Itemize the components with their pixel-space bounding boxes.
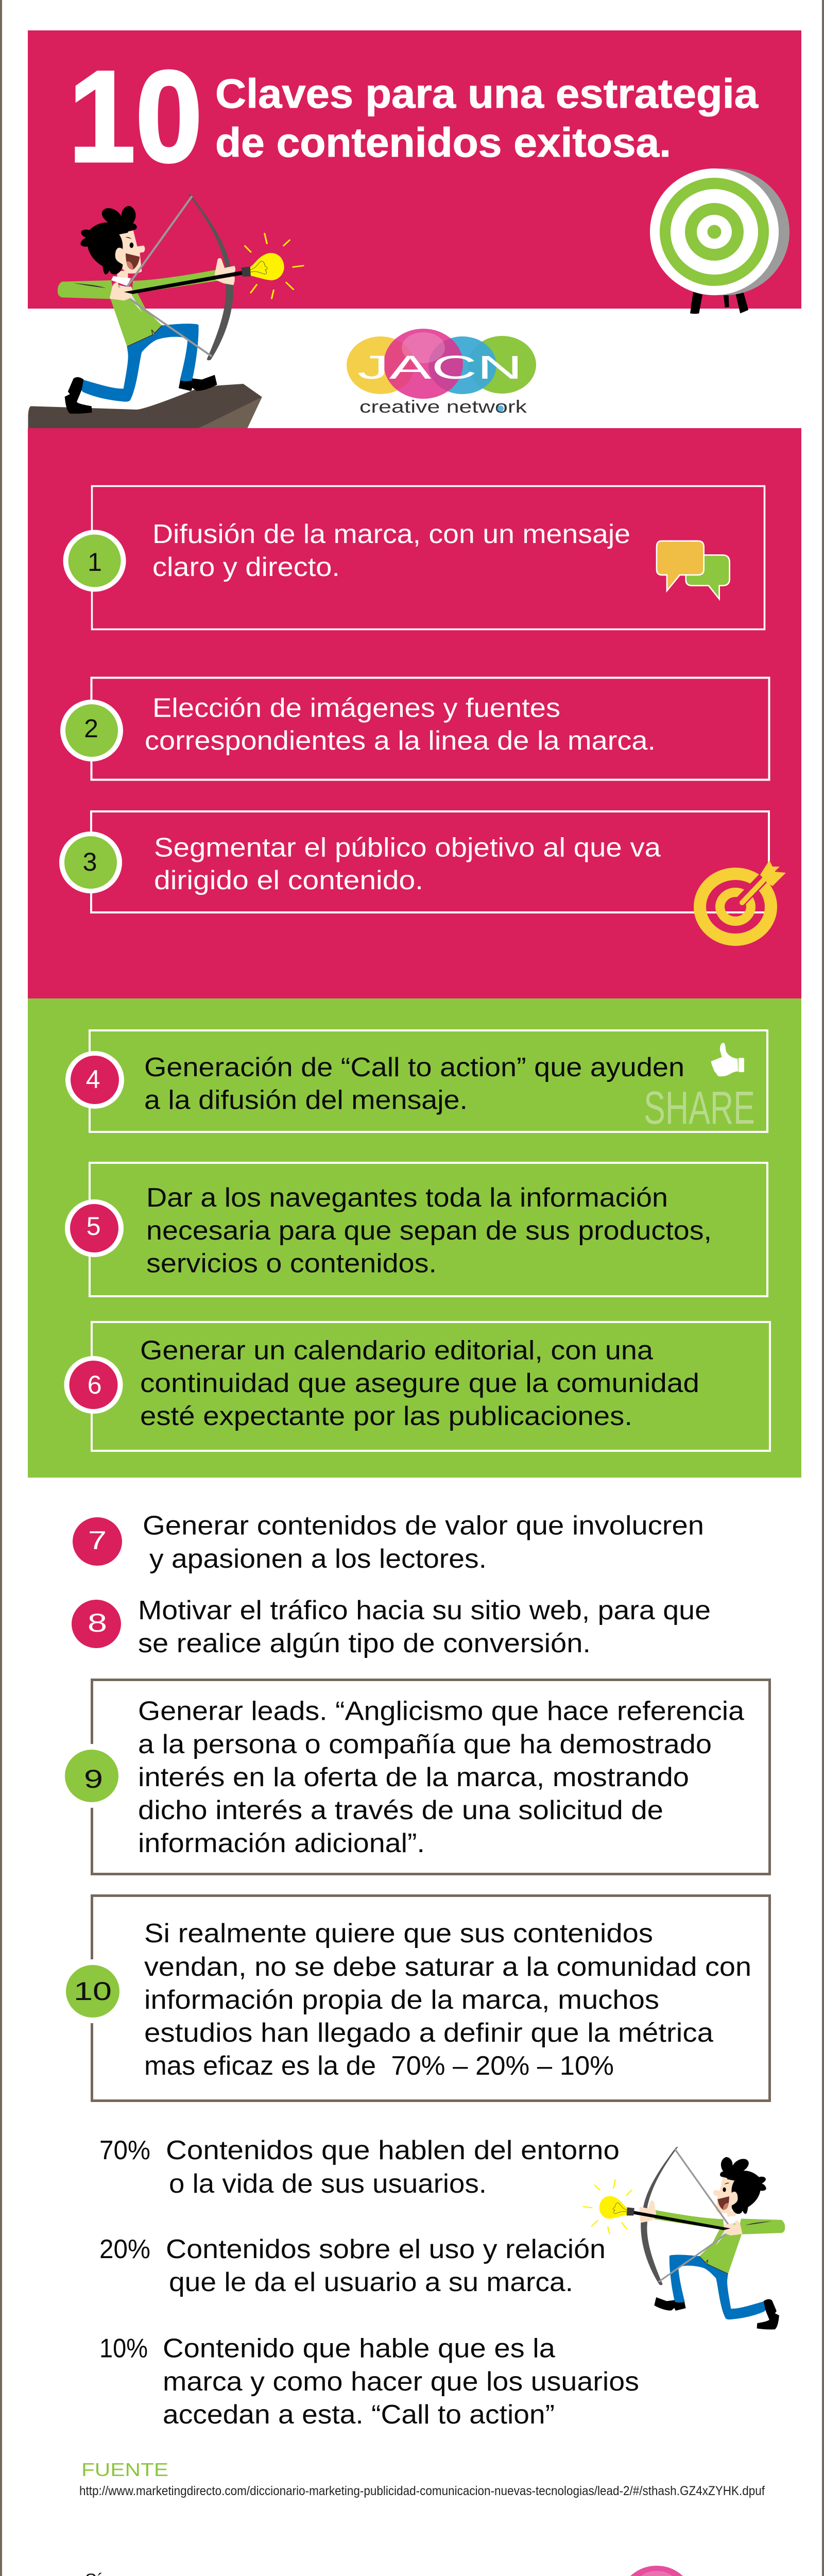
text block: 10 percent: marca y como hacer que los usuarios <box>163 2367 639 2397</box>
key 10 text: información propia de la marca, muchos <box>144 1985 659 2015</box>
icon: mirrored archer <box>583 2147 785 2330</box>
icon: rock ledge <box>28 384 262 429</box>
key 3 text: Segmentar el público objetivo al que va <box>154 833 661 862</box>
key 8 text: Motivar el tráfico hacia su sitio web, para que <box>138 1596 711 1625</box>
badge 10 <box>61 1959 125 2023</box>
text block: 70 percent: o la vida de sus usuarios. <box>169 2169 487 2199</box>
key 7 <box>73 1511 704 1574</box>
key 4 text: a la difusión del mensaje. <box>144 1085 468 1115</box>
key 6 text: Generar un calendario editorial, con una <box>140 1335 653 1365</box>
badge 3: 3 <box>83 848 97 876</box>
logo: JACN creative network: creative network <box>359 397 527 417</box>
badge 6: 6 <box>88 1370 102 1399</box>
badge 2: 2 <box>84 714 98 743</box>
key 6 text: continuidad que asegure que la comunidad <box>140 1368 699 1398</box>
title <box>215 71 759 165</box>
key 5 text: Dar a los navegantes toda la información <box>146 1183 668 1213</box>
text block: 10 percent: Contenido que hable que es la <box>163 2334 555 2364</box>
logo: JACN creative network: JACN <box>357 349 523 386</box>
key 3 text <box>154 833 661 895</box>
badge 5: 5 <box>87 1212 101 1241</box>
panel: header banner <box>28 30 801 309</box>
share label: SHARE <box>644 1082 755 1134</box>
key 2 box <box>92 678 769 780</box>
key 4 text <box>144 1053 684 1115</box>
badge 6 <box>64 1356 123 1414</box>
key 1 text <box>152 519 630 582</box>
badge 4: 4 <box>86 1065 100 1094</box>
badge 9: 9 <box>84 1765 103 1793</box>
text block: 10 percent: 10% <box>99 2334 148 2364</box>
badge 4 <box>65 1051 124 1109</box>
key 9 text: interés en la oferta de la marca, mostrando <box>138 1762 689 1792</box>
key 4 box <box>90 1030 767 1132</box>
key 9 text <box>138 1696 744 1858</box>
text block: 20 percent: 20% <box>99 2234 150 2264</box>
key 6 text <box>140 1335 699 1431</box>
icon: yellow target with arrow <box>700 860 786 940</box>
key 10 box <box>92 1896 769 2101</box>
key 10 <box>61 1896 769 2101</box>
badge 10: 10 <box>74 1977 112 2006</box>
key 1 text: Difusión de la marca, con un mensaje <box>152 519 630 549</box>
key 9 text: información adicional”. <box>138 1828 425 1858</box>
title: de contenidos exitosa. <box>215 120 671 165</box>
heading: big number 10: 10 <box>68 44 202 189</box>
key 4 text: Generación de “Call to action” que ayuden <box>144 1053 684 1082</box>
key 7 text <box>143 1511 704 1574</box>
badge 2 <box>60 700 123 761</box>
key 1 text: claro y directo. <box>152 552 340 582</box>
key 5 text: servicios o contenidos. <box>146 1249 437 1279</box>
icon: speech bubbles <box>657 541 730 599</box>
key 2 text <box>145 693 656 756</box>
text block: 70 percent: Contenidos que hablen del entorno <box>166 2136 620 2165</box>
key 9 text: a la persona o compañía que ha demostrado <box>138 1730 712 1759</box>
key 10 text: estudios han llegado a definir que la métrica <box>144 2018 713 2048</box>
source heading: FUENTE <box>81 2459 168 2480</box>
key 2 text: correspondientes a la linea de la marca. <box>145 726 656 756</box>
key 6 text: esté expectante por las publicaciones. <box>140 1401 632 1431</box>
key 8 text <box>138 1596 711 1658</box>
text block: 10 percent <box>99 2334 639 2430</box>
key 9 box <box>92 1680 769 1874</box>
key 9 <box>60 1680 769 1874</box>
text block: 20 percent: Contenidos sobre el uso y relación <box>166 2234 606 2264</box>
key 6 box <box>92 1322 770 1451</box>
panel: pink keys 1 to 3 <box>28 428 801 998</box>
badge 7 <box>73 1517 122 1566</box>
logo: JACN footer <box>581 2566 771 2576</box>
text block: 10 percent: accedan a esta. “Call to action” <box>163 2400 555 2430</box>
badge 3 <box>59 832 122 893</box>
key 10 text: vendan, no se debe saturar a la comunidad con <box>144 1952 751 1982</box>
key 3 text: dirigido el contenido. <box>154 866 423 895</box>
key 10 text: mas eficaz es la de 70% – 20% – 10% <box>144 2051 614 2081</box>
text block: 20 percent <box>99 2234 606 2297</box>
key 2 text: Elección de imágenes y fuentes <box>152 693 560 723</box>
key 7 text: y apasionen a los lectores. <box>149 1544 487 1574</box>
badge 7: 7 <box>88 1526 107 1555</box>
icon: thumbs up <box>711 1043 744 1076</box>
key 10 text <box>144 1919 751 2081</box>
key 8 text: se realice algún tipo de conversión. <box>138 1629 591 1658</box>
key 1 box <box>92 486 764 630</box>
key 9 text: Generar leads. “Anglicismo que hace referencia <box>138 1696 744 1726</box>
text block: 70 percent <box>99 2136 620 2199</box>
icon: archer with light bulb arrow <box>58 194 303 414</box>
key 10 text: Si realmente quiere que sus contenidos <box>144 1919 653 1948</box>
badge 1: 1 <box>88 548 102 577</box>
badge 9 <box>60 1744 124 1808</box>
panel: green keys 4 to 6 <box>28 998 801 1478</box>
logo: JACN creative network <box>347 329 536 417</box>
badge 5 <box>65 1199 124 1257</box>
key 8 <box>72 1596 711 1658</box>
key 5 box <box>90 1163 767 1296</box>
text block: 20 percent: que le da el usuario a su marca. <box>169 2267 573 2297</box>
key 7 text: Generar contenidos de valor que involucren <box>143 1511 704 1540</box>
icon: archery target <box>650 168 789 314</box>
key 5 text <box>146 1183 712 1279</box>
badge 8 <box>72 1600 121 1648</box>
text block: 70 percent: 70% <box>99 2136 150 2165</box>
title: Claves para una estrategia <box>215 71 759 116</box>
badge 1 <box>63 530 126 591</box>
key 9 text: dicho interés a través de una solicitud de <box>138 1795 663 1825</box>
key 3 box <box>91 811 769 912</box>
badge 8: 8 <box>88 1608 107 1637</box>
key 5 text: necesaria para que sepan de sus productos, <box>146 1216 712 1246</box>
source url: http://www.marketingdirecto.com/diccionario-marketing-publicidad-comunicacion-nuevas-tecnologias/lead-2/#/sthash.GZ4xZYHK.dpuf <box>79 2484 765 2498</box>
